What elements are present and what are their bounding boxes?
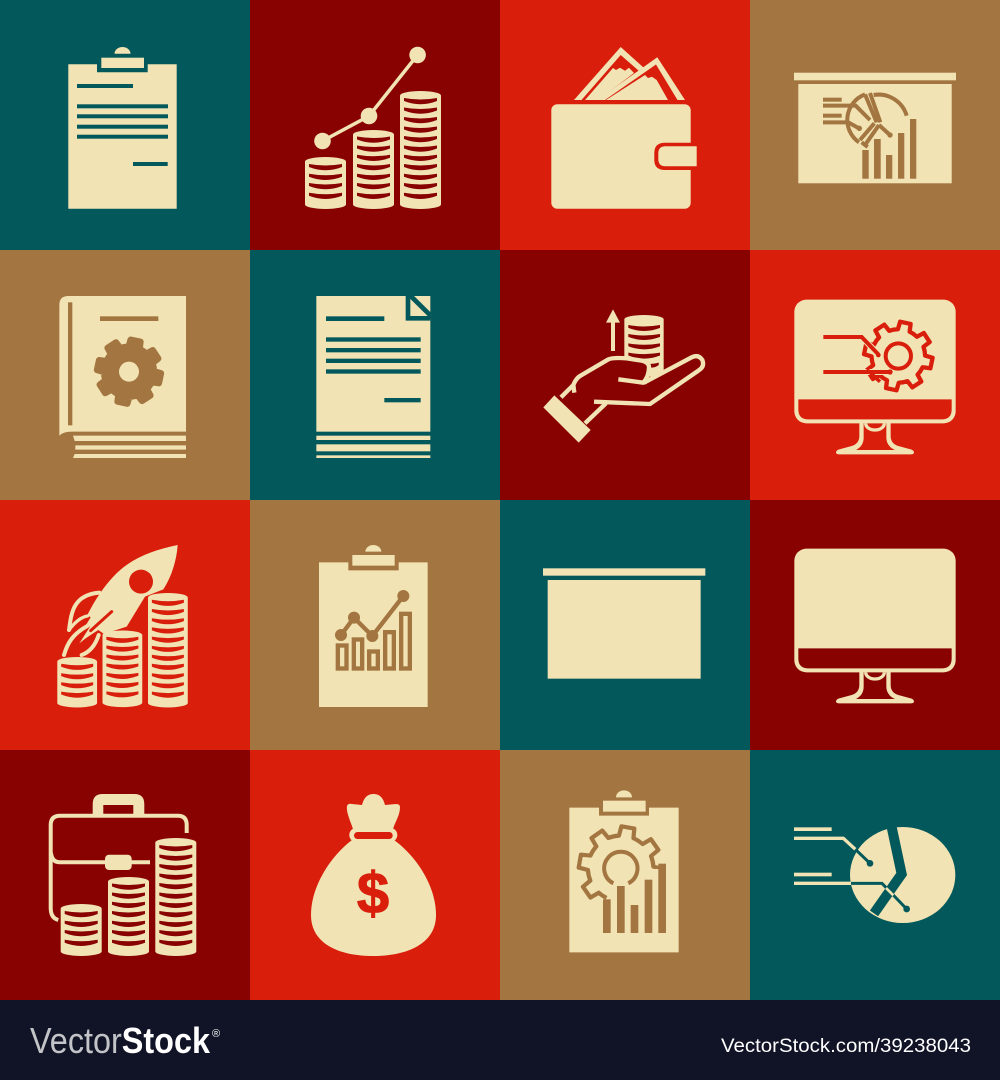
tile: coins growth chart [250, 0, 500, 250]
tile: briefcase and coins [0, 750, 250, 1000]
icon: briefcase with coin stacks [51, 794, 196, 956]
icon: money bag [311, 794, 436, 956]
icon: wallet [551, 47, 697, 209]
tile: rocket and coins [0, 500, 250, 750]
tile: document with folded corner [250, 250, 500, 500]
logo wordmark: VectorStock [30, 1020, 211, 1061]
tile: clipboard document [0, 0, 250, 250]
icon: coin stacks with rising line [305, 47, 441, 209]
tile: gear manual book [0, 250, 250, 500]
icon: presentation board with charts [794, 73, 956, 183]
icon: blank projection screen [543, 568, 705, 679]
icon: clipboard document [68, 47, 177, 209]
icon: book with gear [59, 296, 186, 458]
registered mark: ® [212, 1028, 220, 1040]
icon: clipboard with gear and bars [569, 790, 679, 952]
tile: money bag [250, 750, 500, 1000]
tile: hand holding coins [500, 250, 750, 500]
tile: blank monitor [750, 500, 1000, 750]
icon: hand with coins and arrow [543, 309, 703, 443]
tile: projection screen [500, 500, 750, 750]
icon: rocket launching over coin stacks [57, 545, 188, 707]
icon: document [316, 293, 433, 458]
tile: monitor with gear [750, 250, 1000, 500]
icon: money bag: $ [357, 861, 389, 926]
tile: wallet with money [500, 0, 750, 250]
footer bar [0, 1000, 1000, 1080]
icon: blank monitor [794, 549, 956, 703]
icon: exploded pie chart with leader lines [794, 824, 955, 923]
icon: clipboard with bar and line chart [319, 545, 428, 707]
tile: pie chart [750, 750, 1000, 1000]
tile: presentation board [750, 0, 1000, 250]
tile: clipboard with chart [250, 500, 500, 750]
icon: monitor with gear [794, 300, 956, 454]
tile: clipboard with gear [500, 750, 750, 1000]
image id: VectorStock.com/39238043 [721, 1036, 971, 1057]
